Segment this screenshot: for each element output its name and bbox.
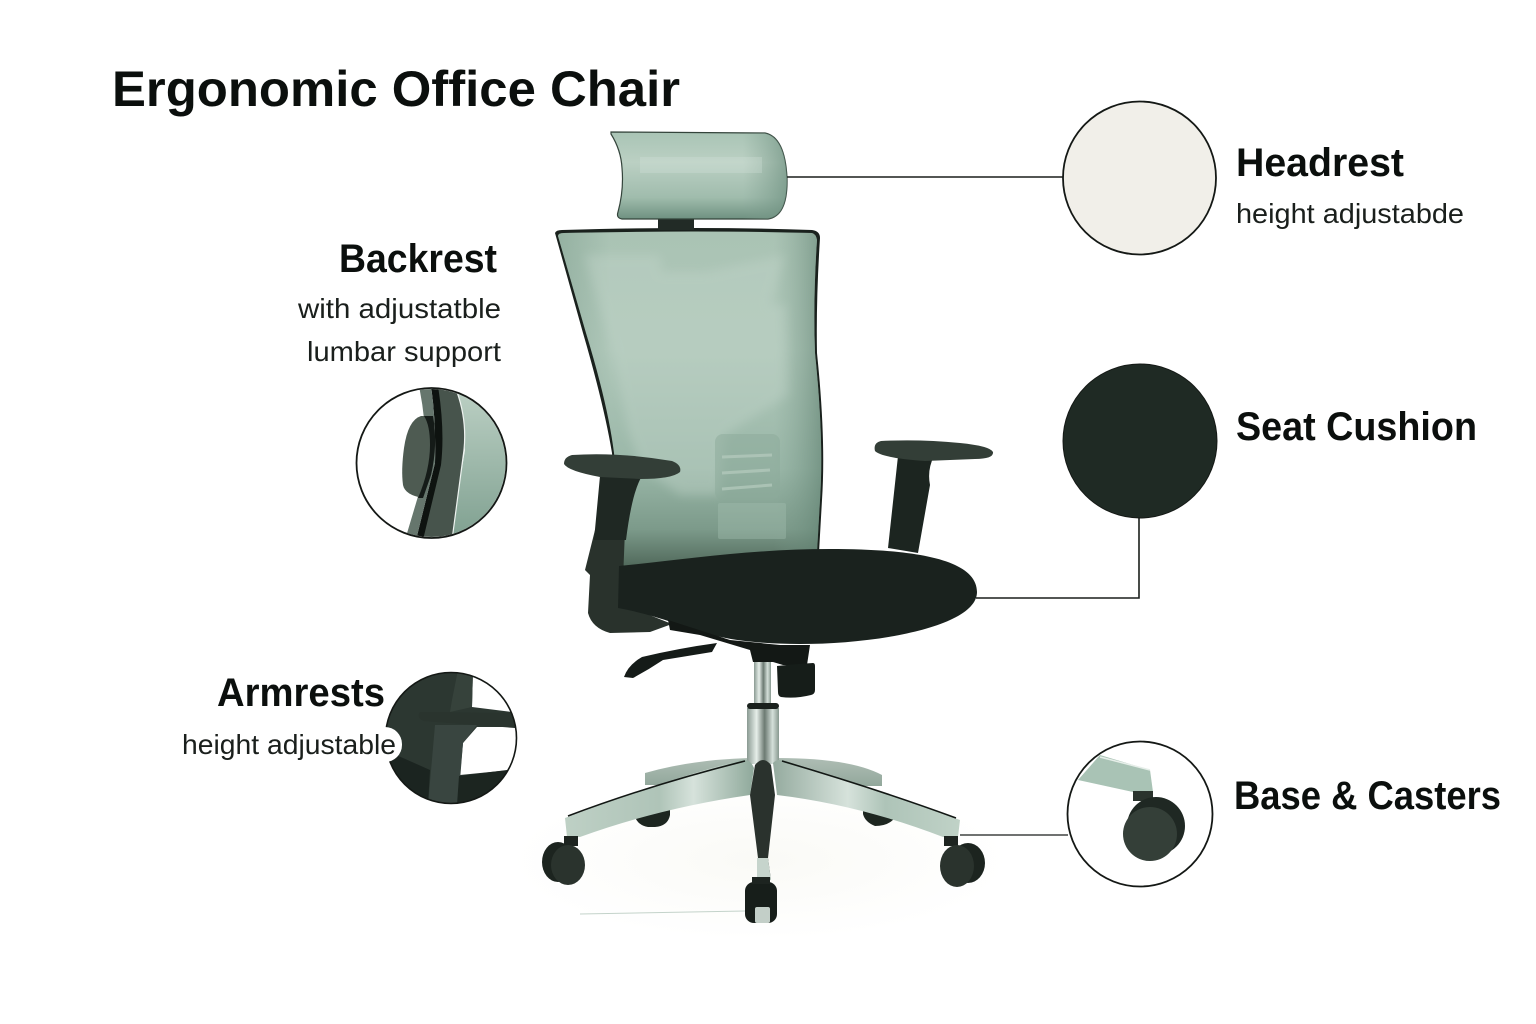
lumbar slots: [722, 455, 772, 489]
label: backrest: [297, 237, 501, 367]
floor shadow: [510, 780, 1010, 940]
tilt mechanism: [668, 620, 810, 665]
inset: arm highlight: [1100, 757, 1150, 770]
gas cylinder piston: [754, 659, 771, 705]
callout: lumbar detail: [356, 386, 510, 540]
inset: grey band: [407, 389, 436, 536]
caster: front left: [542, 836, 585, 885]
right armrest pad: [875, 440, 993, 461]
title: Ergonomic Office Chair: [112, 61, 680, 117]
black edge on left arm: [568, 761, 745, 816]
leader line: headrest: [787, 176, 1063, 178]
headrest: [611, 132, 787, 219]
label: backrest: lumbar support: [307, 336, 501, 367]
inset: shadow lower left: [390, 756, 430, 798]
inset: white edge: [452, 392, 465, 540]
inset: dark frame band: [421, 386, 465, 540]
base arm: front right: [773, 760, 960, 837]
cylinder collar: [747, 703, 779, 709]
label: headrest: Headrest: [1236, 141, 1404, 185]
label: headrest: height adjustabde: [1236, 198, 1464, 229]
backrest mesh: [555, 228, 823, 570]
leader line: seat cushion: [976, 518, 1139, 598]
caster: front right: [940, 836, 985, 887]
inset: mesh: [451, 394, 506, 534]
mesh highlight pattern: [585, 255, 788, 495]
label: seat cushion: Seat Cushion: [1236, 405, 1477, 449]
label: armrests: [182, 671, 396, 760]
black edge on right arm: [782, 761, 956, 818]
height adjustment knob: [777, 663, 815, 698]
caster: rear right: [863, 808, 896, 826]
callout: headrest swatch: [1063, 102, 1216, 254]
caster: rear left: [634, 807, 670, 827]
left armrest pad: [564, 454, 680, 479]
centre arm chrome tip: [757, 858, 771, 880]
inset: arm post: [428, 725, 477, 805]
seat cushion: [618, 549, 977, 644]
label: headrest: [1236, 141, 1464, 229]
inset: lumbar pad shadow: [418, 416, 435, 498]
label: armrests: Armrests: [217, 671, 385, 715]
back frame: [585, 530, 672, 633]
base arm: rear right: [778, 758, 882, 786]
right arm post: [888, 456, 934, 553]
inset: seat: [457, 770, 508, 802]
label: armrests: height adjustable: [182, 729, 396, 760]
floor line under caster: [580, 911, 745, 914]
inset: arm pad: [502, 727, 515, 728]
inset: black band: [416, 386, 442, 540]
base arm: front centre: [750, 760, 775, 880]
lumbar support panel: [715, 434, 780, 500]
cylinder cover: [747, 708, 779, 764]
inset: white background top: [472, 677, 510, 712]
label: backrest: Backrest: [339, 237, 497, 281]
left arm post: [594, 476, 642, 540]
label: backrest: with adjustatble: [297, 293, 501, 324]
inset: lumbar pad: [402, 416, 435, 498]
callout: seat cushion swatch: [1063, 364, 1217, 518]
inset: front wheel: [1123, 807, 1177, 861]
inset: base arm: [1078, 755, 1153, 792]
base arm: rear left: [645, 758, 748, 785]
label knock-out behind armrest text: [330, 727, 402, 762]
office chair illustration: [510, 132, 1010, 940]
lower mesh panel: [718, 503, 786, 539]
label: base and casters: Base & Casters: [1234, 774, 1501, 818]
inset: caster neck: [1133, 791, 1153, 801]
recline lever: [624, 643, 717, 678]
inset: backrest frame: [450, 674, 473, 712]
inset: white background right: [460, 727, 520, 775]
callout: armrest detail: [385, 670, 520, 805]
caster: front centre: [745, 877, 777, 923]
inset: rear wheel: [1127, 797, 1185, 855]
headrest support post: [658, 218, 694, 230]
leader line: base and casters: [960, 834, 1068, 836]
base arm: front left: [565, 760, 754, 837]
callout: base and casters detail: [1068, 742, 1212, 886]
